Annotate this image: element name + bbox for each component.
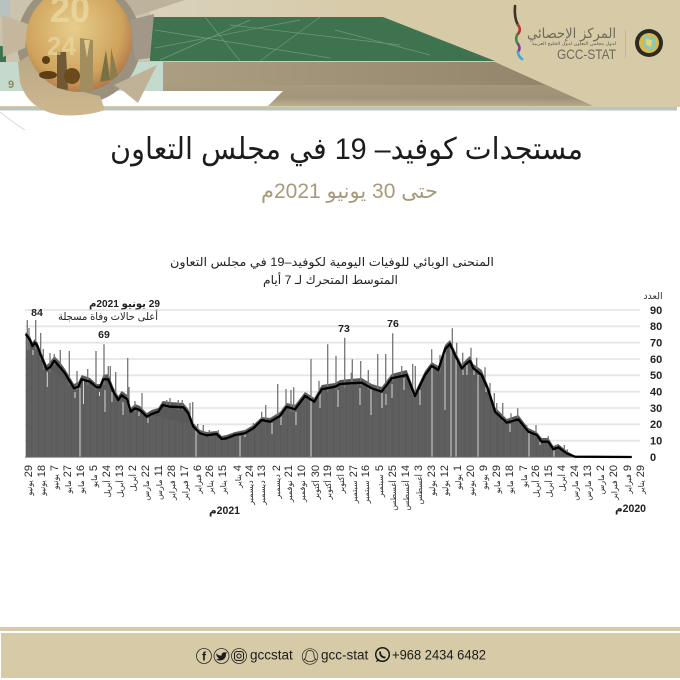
x axis date labels: 9 يونيو bbox=[478, 465, 490, 490]
x axis date labels: 2 مارس bbox=[595, 465, 607, 495]
callout: highest recorded deaths: 29 يونيو 2021م bbox=[89, 298, 160, 310]
x axis date labels: 29 مايو bbox=[491, 465, 503, 494]
icon: ribbon bbox=[515, 6, 522, 59]
green band bbox=[150, 17, 495, 61]
y axis labels: 90 bbox=[650, 305, 662, 317]
callout: highest recorded deaths: أعلى حالات وفاة مسجلة bbox=[58, 309, 158, 323]
x axis date labels: 23 يوليو bbox=[426, 465, 438, 497]
y axis labels: 30 bbox=[650, 403, 662, 415]
x axis date labels: 6 فبراير bbox=[192, 465, 204, 495]
stripe overlay bbox=[26, 334, 632, 457]
x axis date labels: 24 أبريل bbox=[101, 465, 113, 497]
x axis date labels: 4 يناير bbox=[232, 465, 244, 489]
handle: gcc-stat: gcc-stat bbox=[321, 648, 369, 662]
year labels: 2020م bbox=[615, 503, 646, 515]
icon: GCC emblem bbox=[635, 29, 663, 57]
subtitle: حتى 30 يونيو 2021م bbox=[261, 180, 438, 203]
x axis date labels: 11 مارس bbox=[153, 465, 165, 500]
chart title: المنحنى الوبائي للوفيات اليومية لكوفيد–19 في مجلس التعاون bbox=[170, 255, 494, 270]
x axis date labels: 25 أغسطس bbox=[387, 465, 399, 511]
bars bbox=[26, 320, 632, 457]
x axis date labels: 30 أكتوبر bbox=[310, 465, 322, 501]
x axis date labels: 24 مارس bbox=[569, 465, 581, 501]
x axis date labels: 5 مايو bbox=[88, 465, 100, 488]
peak labels: 73 bbox=[338, 323, 350, 335]
x axis date labels: 16 سبتمبر bbox=[360, 465, 372, 504]
icon: whatsapp bbox=[376, 648, 389, 662]
y axis labels: 60 bbox=[650, 354, 662, 366]
y axis labels: العدد bbox=[643, 291, 663, 302]
x axis date labels: 3 أغسطس bbox=[413, 465, 425, 504]
year labels: 2021م bbox=[209, 505, 240, 517]
x axis date labels: 20 فبراير bbox=[608, 465, 620, 501]
x axis date labels: 19 أكتوبر bbox=[322, 465, 334, 501]
icon: snapchat bbox=[302, 649, 318, 664]
x axis date labels: 27 سبتمبر bbox=[348, 465, 360, 504]
emblem: gold globe with skyline bbox=[0, 0, 185, 115]
x axis date labels: 1 يوليو bbox=[452, 465, 464, 491]
handle: gccstat: gccstat bbox=[250, 648, 293, 662]
x axis date labels: 7 مايو bbox=[518, 465, 530, 488]
peak labels: 76 bbox=[387, 318, 399, 330]
x axis date labels: 14 أغسطس bbox=[400, 465, 412, 511]
y axis labels: 20 bbox=[650, 419, 662, 431]
x axis date labels: 26 أبريل bbox=[530, 465, 542, 497]
x axis date labels: 4 أبريل bbox=[556, 465, 568, 491]
x axis date labels: 21 نوفمبر bbox=[283, 465, 295, 503]
x axis date labels: 7 يونيو bbox=[49, 465, 61, 490]
low days bbox=[33, 345, 554, 457]
x axis date labels: 2 أبريل bbox=[127, 465, 139, 491]
x axis date labels: 17 فبراير bbox=[179, 465, 191, 501]
x axis date labels: 10 نوفمبر bbox=[296, 465, 308, 503]
x axis date labels: 29 يونيو bbox=[23, 465, 35, 496]
logo: GCC-STAT bbox=[557, 46, 616, 62]
y axis labels: 70 bbox=[650, 338, 662, 350]
peak labels: 69 bbox=[98, 329, 110, 341]
icon: facebook: f bbox=[202, 650, 207, 664]
x axis date labels: 9 فبراير bbox=[622, 465, 634, 495]
spikes bbox=[27, 320, 567, 454]
chart title bbox=[170, 255, 494, 288]
y axis labels: 10 bbox=[650, 436, 662, 448]
callout: highest recorded deaths bbox=[58, 298, 160, 323]
title: مستجدات كوفيد– 19 في مجلس التعاون bbox=[110, 133, 583, 167]
y axis labels: 50 bbox=[650, 370, 662, 382]
x axis date labels: 27 مايو bbox=[62, 465, 74, 494]
moving average line bbox=[26, 334, 632, 457]
x axis date labels: 13 ديسمبر bbox=[256, 465, 268, 506]
icon: facebook bbox=[196, 648, 212, 664]
x axis date labels: 28 فبراير bbox=[166, 465, 178, 501]
x axis date labels: 5 سبتمبر bbox=[374, 465, 386, 498]
y axis labels: 80 bbox=[650, 321, 662, 333]
icon: instagram bbox=[232, 648, 246, 664]
x axis date labels: 13 أبريل bbox=[114, 465, 126, 497]
x axis date labels: 8 أكتوبر bbox=[335, 465, 347, 494]
x axis date labels: 18 يونيو bbox=[36, 465, 48, 496]
x axis date labels: 15 أبريل bbox=[543, 465, 555, 497]
y axis labels: 0 bbox=[650, 452, 656, 464]
year labels bbox=[209, 503, 646, 517]
y axis labels bbox=[643, 291, 663, 464]
icon: twitter bbox=[214, 648, 229, 664]
y axis labels: 40 bbox=[650, 386, 662, 398]
x axis date labels: 16 مايو bbox=[75, 465, 87, 494]
x axis date labels: 12 يوليو bbox=[439, 465, 451, 497]
logo text: المركز الإحصائي bbox=[527, 25, 616, 42]
x axis date labels: 24 ديسمبر bbox=[244, 465, 256, 506]
header banner bbox=[0, 0, 680, 130]
skyline bbox=[39, 0, 118, 92]
chart: daily deaths with 7 day moving average bbox=[23, 291, 663, 517]
phone number: +968 2434 6482 bbox=[392, 648, 486, 662]
x axis date labels: 20 يونيو bbox=[465, 465, 477, 496]
x axis date labels: 26 يناير bbox=[204, 465, 216, 495]
emblem: gold globe with skyline: 9 bbox=[8, 79, 14, 91]
baseline bbox=[25, 457, 632, 458]
x axis date labels: 22 مارس bbox=[140, 465, 152, 501]
logo bbox=[515, 6, 663, 62]
peak labels: 84 bbox=[31, 307, 43, 319]
x axis date labels: 2 ديسمبر bbox=[271, 465, 283, 500]
footer bbox=[0, 627, 680, 678]
x axis date labels bbox=[23, 465, 647, 511]
chart title: المتوسط المتحرك لـ 7 أيام bbox=[263, 272, 398, 288]
logo: لدول مجلس التعاون لدول الخليج العربية bbox=[532, 41, 616, 46]
x axis date labels: 13 مارس bbox=[582, 465, 594, 501]
peak labels bbox=[31, 307, 399, 341]
x axis date labels: 15 يناير bbox=[217, 465, 229, 495]
x axis date labels: 29 يناير bbox=[635, 465, 647, 495]
x axis date labels: 18 مايو bbox=[504, 465, 516, 494]
skyline: 24 bbox=[47, 31, 76, 61]
